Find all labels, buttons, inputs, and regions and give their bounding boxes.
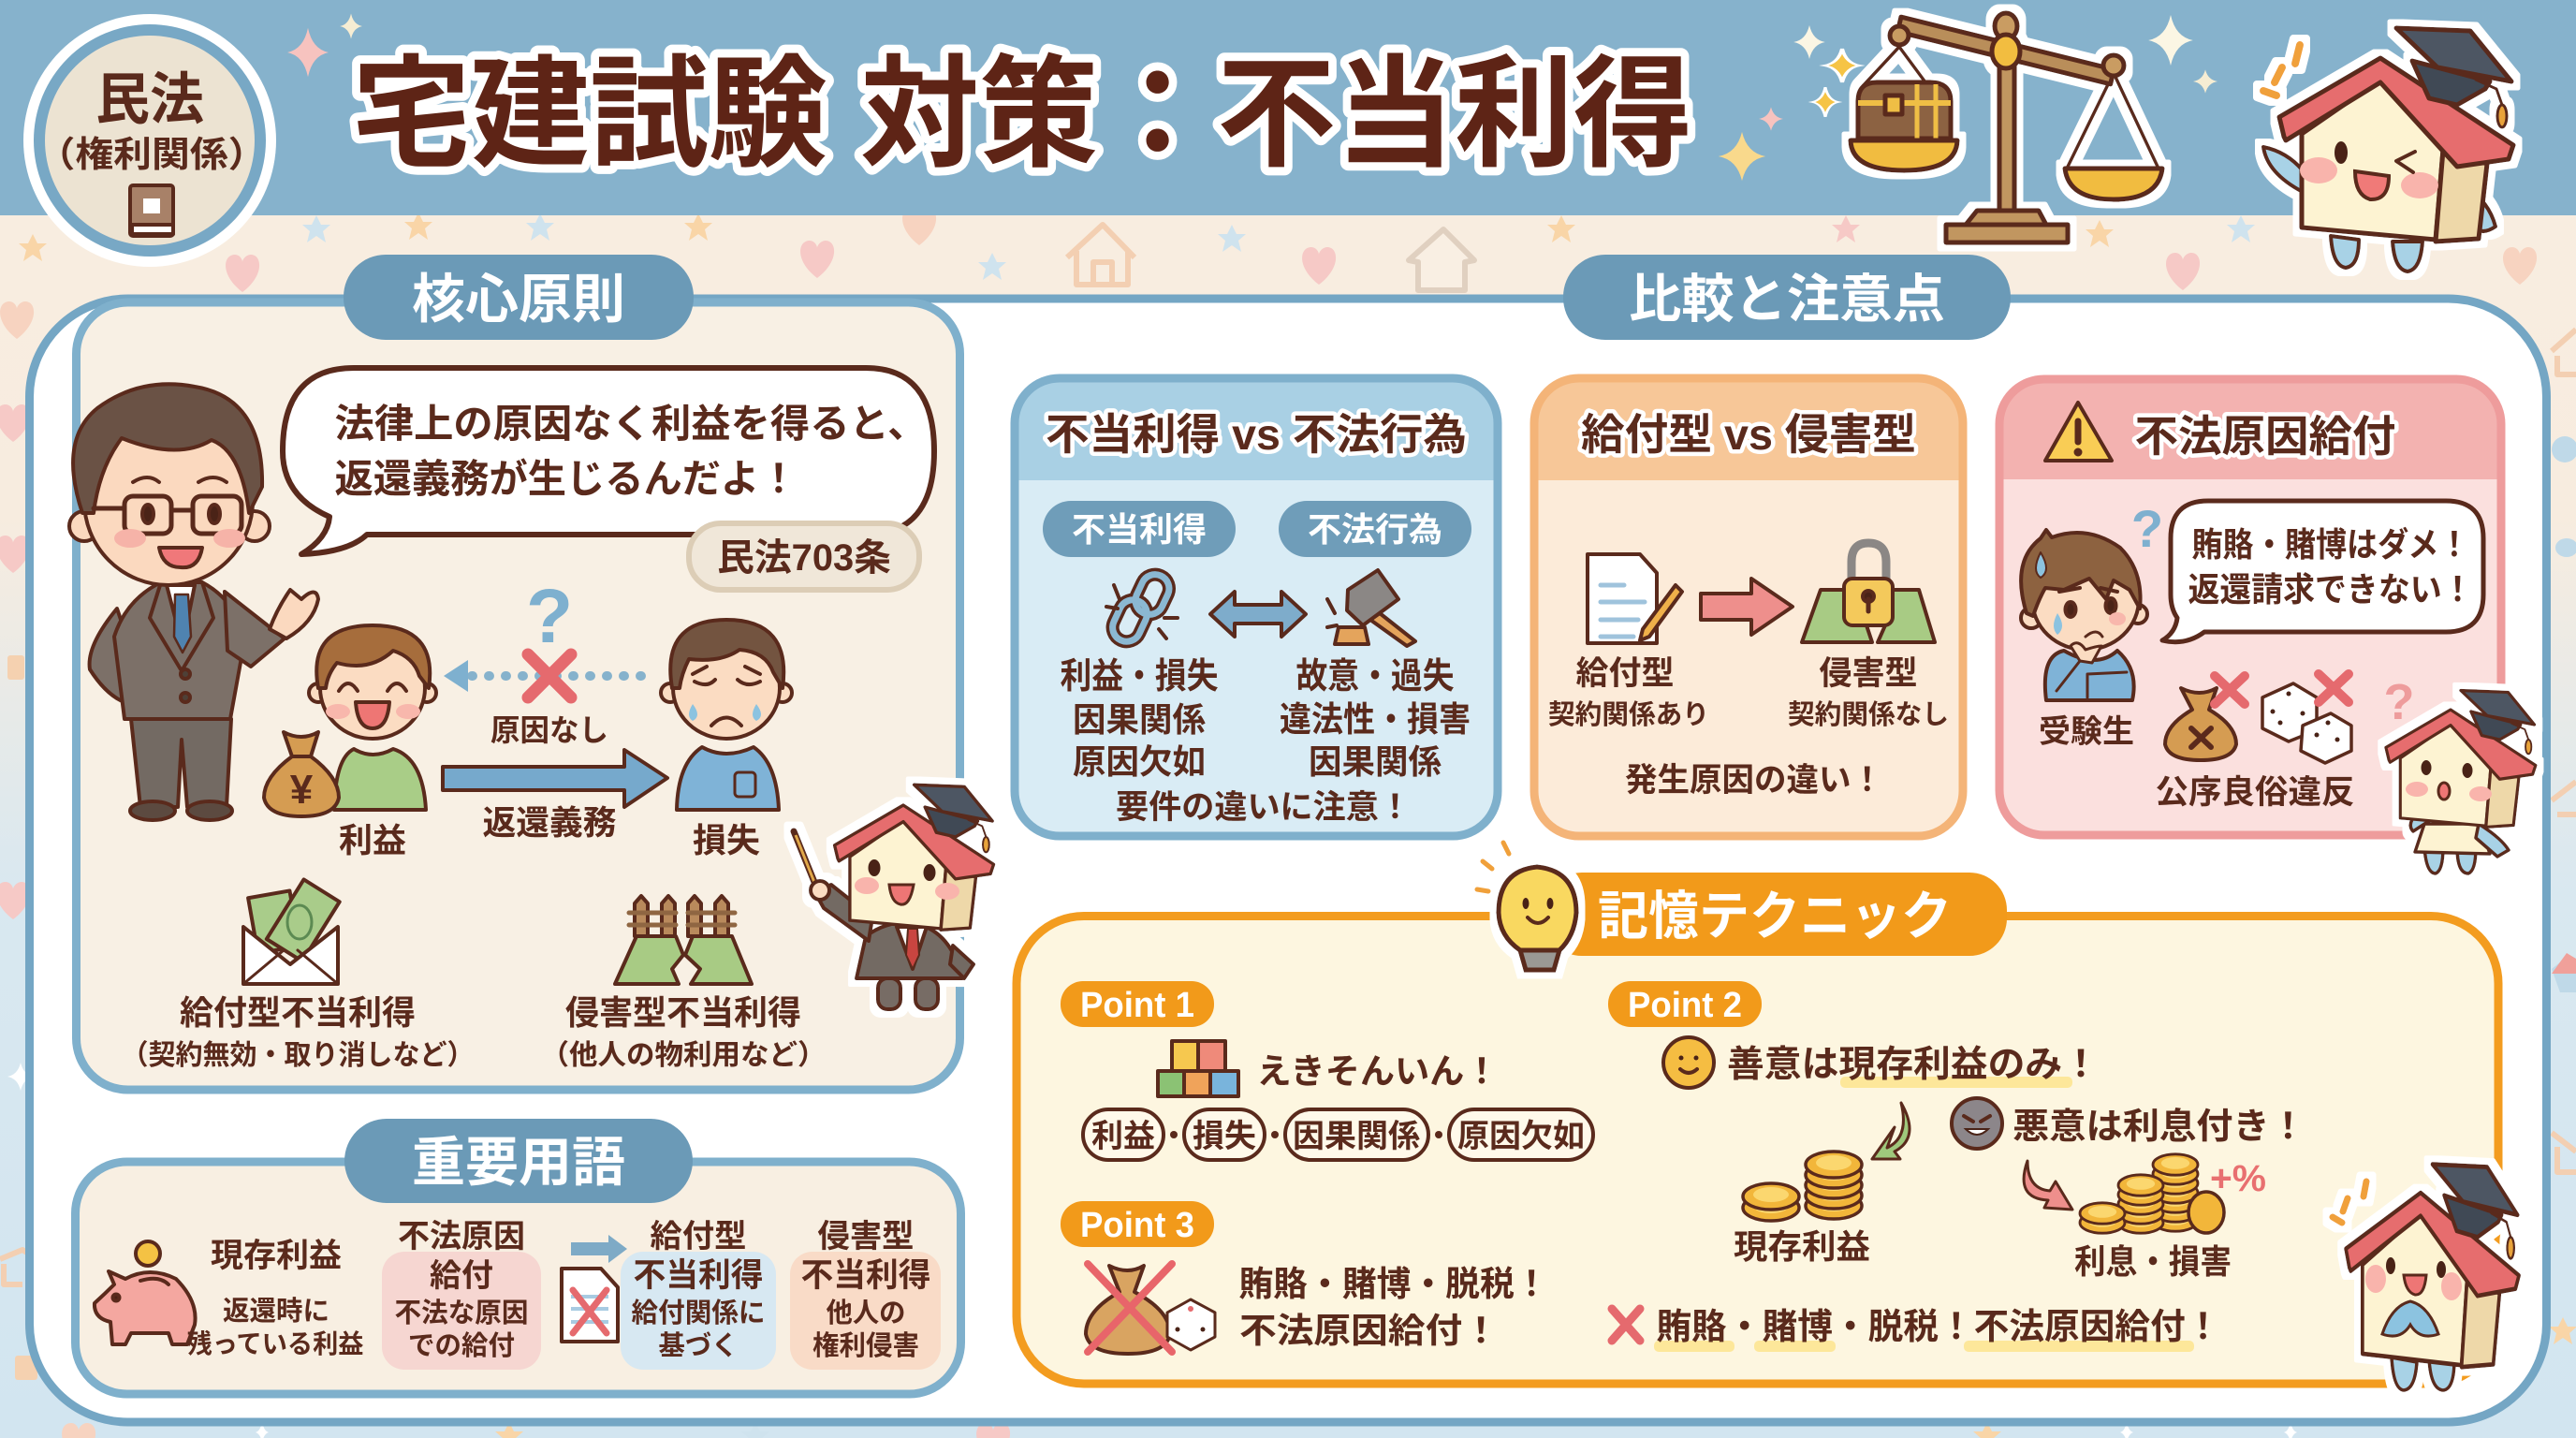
speech bubble: 賄賂・賭博はダメ！ <box>2192 525 2469 564</box>
list: unjust enrichment requirements: 利益・損失 <box>1060 657 1219 697</box>
list: tort requirements: 因果関係 <box>1309 742 1442 781</box>
tag: point 1: Point 1 <box>1080 986 1194 1025</box>
term: infringement type: 他人の <box>826 1298 906 1328</box>
icon: bad coin <box>1952 1098 2002 1149</box>
icon: crossed dice <box>2262 674 2351 763</box>
icon: red cross <box>528 654 571 697</box>
heading: key terms: 重要用語 <box>412 1133 625 1193</box>
icon: question mark: ? <box>526 574 573 659</box>
heading: key terms <box>344 1119 693 1203</box>
chips: four requirements: 損失 <box>1193 1119 1256 1154</box>
label: infringement-type <box>541 993 826 1071</box>
icon: bulb rays <box>1477 843 1509 891</box>
character: happy boy with profit <box>309 625 436 810</box>
chips: four requirements: 利益 <box>1091 1119 1155 1154</box>
term: benefit type: 給付関係に <box>631 1298 766 1328</box>
term: infringement type: 侵害型 <box>818 1219 914 1255</box>
point 3 text <box>1239 1265 1548 1350</box>
label: public policy violation: 公序良俗違反 <box>2155 774 2355 811</box>
label: benefit-type <box>122 993 474 1071</box>
badge: civil law: 民法 <box>95 68 204 131</box>
tag: point 3 <box>1061 1201 1214 1247</box>
list: tort requirements: 違法性・損害 <box>1280 700 1471 739</box>
term: current benefit: 残っている利益 <box>187 1329 363 1358</box>
icon: scales of justice <box>1851 13 2162 242</box>
tag: point 2 <box>1608 981 1762 1027</box>
speech bubble: 返還請求できない！ <box>2188 570 2473 609</box>
panel: unjust enrichment vs tort <box>1015 378 1498 836</box>
chips: four requirements: 因果関係 <box>1293 1119 1420 1154</box>
term: current benefit: 返還時に <box>223 1296 329 1327</box>
heading: memory techniques: 記憶テクニック <box>1598 887 1952 946</box>
chips: four requirements <box>1083 1109 1593 1160</box>
tag: point 2: Point 2 <box>1628 986 1742 1025</box>
mascot: house with graduation cap, waving <box>2263 28 2513 271</box>
term: infringement type <box>790 1219 941 1370</box>
term: current benefit <box>187 1238 363 1358</box>
sparkles <box>287 13 2217 181</box>
tag: tort: 不法行為 <box>1308 510 1442 549</box>
text: illegal examples: 賄賂・賭博・脱税！不法原因給付！ <box>1657 1308 2220 1347</box>
heading: comparison <box>1563 255 2011 340</box>
label: interest and damage: 利息・損害 <box>2074 1242 2232 1281</box>
speech bubble: 法律上の原因なく利益を得ると、 <box>335 402 927 446</box>
icon: money bag <box>264 732 339 816</box>
arrow: green <box>1872 1103 1910 1159</box>
term: current benefit: 現存利益 <box>211 1238 342 1274</box>
label: benefit-type: 給付型不当利得 <box>180 993 416 1032</box>
mascot: teacher house with pointer <box>794 785 994 1009</box>
tag: article 703: 民法703条 <box>717 537 891 579</box>
list: tort requirements: 故意・過失 <box>1295 657 1455 697</box>
label: infringement type: 侵害型 <box>1820 655 1917 692</box>
mnemonic: えきそんいん！ <box>1256 1052 1500 1091</box>
label: return duty: 返還義務 <box>483 803 616 842</box>
panel: benefit vs infringement: 給付型 vs 侵害型 <box>1581 410 1916 459</box>
label: examinee: 受験生 <box>2039 714 2134 750</box>
speech bubble <box>283 368 934 554</box>
panel: memory techniques <box>1017 843 2519 1390</box>
label: benefit type: 給付型 <box>1576 655 1674 692</box>
character: teacher <box>69 384 318 820</box>
label: infringement-type: （他人の物利用など） <box>541 1040 826 1071</box>
label: benefit type <box>1548 655 1709 730</box>
text: bad faith: 悪意は利息付き！ <box>2012 1108 2306 1147</box>
icon: red cross <box>1612 1309 1640 1341</box>
tag: article 703 <box>689 523 919 590</box>
header band <box>0 0 2576 215</box>
character: sad boy with loss <box>661 620 792 810</box>
arrow: return duty <box>443 750 667 807</box>
list: unjust enrichment requirements: 原因欠如 <box>1073 742 1206 781</box>
text: good faith: 善意は現存利益のみ！ <box>1727 1045 2100 1085</box>
label: infringement type: 契約関係なし <box>1788 699 1949 730</box>
note: 発生原因の違い！ <box>1625 762 1883 799</box>
list: unjust enrichment requirements <box>1060 657 1219 781</box>
heading: comparison: 比較と注意点 <box>1629 270 1945 329</box>
icon: book <box>130 185 173 236</box>
mascot: puzzled house <box>2386 691 2536 873</box>
arrow: dotted no-cause arrow <box>444 660 651 692</box>
list: unjust enrichment requirements: 因果関係 <box>1073 700 1206 739</box>
label: infringement-type: 侵害型不当利得 <box>565 993 801 1032</box>
icon: question mark: ? <box>2131 499 2163 558</box>
highlight marker <box>1840 1077 2072 1088</box>
icon: warning <box>2045 403 2112 461</box>
term: benefit type: 基づく <box>659 1330 738 1361</box>
tag: unjust enrichment: 不当利得 <box>1072 510 1207 549</box>
icon: coins current benefit <box>1743 1152 1862 1221</box>
icon: light bulb <box>1499 867 1576 970</box>
label: loss: 損失 <box>693 821 760 859</box>
arrow: red <box>1701 579 1793 635</box>
highlight markers <box>1654 1341 2194 1352</box>
point 3 text: 賄賂・賭博・脱税！ <box>1239 1265 1548 1303</box>
term: infringement type: 権利侵害 <box>812 1330 919 1361</box>
term: illegal cause: 不法な原因 <box>395 1298 528 1328</box>
panel: unjust enrichment vs tort: 不当利得 vs 不法行為 <box>1046 410 1467 459</box>
label: current benefit: 現存利益 <box>1734 1227 1870 1266</box>
arrow <box>571 1235 627 1263</box>
icon: crossed money bag <box>2165 676 2245 760</box>
icon: locked land <box>1802 543 1935 642</box>
term: benefit type: 給付型 <box>650 1219 747 1255</box>
label: plus percent: +% <box>2210 1158 2266 1199</box>
label: benefit type: 契約関係あり <box>1548 699 1709 730</box>
label: profit: 利益 <box>339 821 406 859</box>
icon: piggy bank <box>95 1241 196 1344</box>
icon: broken chain <box>1106 570 1178 646</box>
tag: tort <box>1279 501 1471 557</box>
icon: good coin <box>1663 1037 1714 1088</box>
panel: illegal cause payment <box>1999 379 2536 873</box>
term: benefit type <box>621 1219 776 1370</box>
label: infringement type <box>1788 655 1949 730</box>
note: 要件の違いに注意！ <box>1116 789 1412 826</box>
term: illegal cause: 給付 <box>430 1258 493 1294</box>
speech bubble <box>2162 501 2483 642</box>
icon: pink question mark: ? <box>2383 674 2415 730</box>
icon: stacked blocks <box>1158 1041 1238 1096</box>
title: 宅建試験 対策：不当利得 <box>352 46 1692 183</box>
panel: core principle <box>69 302 994 1090</box>
term: illegal cause <box>382 1219 541 1370</box>
panel: benefit vs infringement <box>1534 378 1963 836</box>
point 3 text: 不法原因給付！ <box>1239 1312 1500 1350</box>
badge: civil law <box>23 14 276 267</box>
icon: money bag: ¥ <box>290 767 314 813</box>
badge: civil law: （権利関係） <box>37 136 266 175</box>
icon: gavel <box>1327 570 1415 646</box>
heading: core principle <box>344 255 694 340</box>
list: tort requirements <box>1280 657 1471 781</box>
tag: unjust enrichment <box>1043 501 1236 557</box>
icon: crossed bag and dice <box>1086 1264 1215 1354</box>
panel: illegal cause payment: 不法原因給付 <box>2134 412 2396 461</box>
icon: coins with interest <box>2080 1154 2224 1233</box>
mascot: house with moustache <box>2333 1165 2519 1390</box>
term: infringement type: 不当利得 <box>801 1257 930 1294</box>
icon: fence on split land <box>615 896 752 984</box>
icon: crossed document <box>562 1269 618 1342</box>
character: student <box>2021 530 2147 700</box>
term: illegal cause: での給付 <box>408 1330 515 1361</box>
arrow: pink <box>2024 1161 2072 1210</box>
icon: document with pencil <box>1588 554 1682 643</box>
panel: key terms <box>75 1162 960 1394</box>
term: illegal cause: 不法原因 <box>398 1219 525 1255</box>
main white panel <box>30 299 2546 1422</box>
tag: point 3: Point 3 <box>1080 1206 1194 1245</box>
arrow: double <box>1210 592 1306 637</box>
speech bubble: 返還義務が生じるんだよ！ <box>335 457 798 501</box>
term: benefit type: 不当利得 <box>633 1257 764 1294</box>
label: no cause: 原因なし <box>490 713 608 747</box>
heading: core principle: 核心原則 <box>412 270 625 330</box>
tag: point 1 <box>1061 981 1214 1027</box>
label: benefit-type: （契約無効・取り消しなど） <box>122 1040 474 1071</box>
heading: memory techniques <box>1544 873 2007 956</box>
icon: envelope with banknotes <box>243 879 340 984</box>
chips: four requirements: 原因欠如 <box>1457 1119 1585 1154</box>
